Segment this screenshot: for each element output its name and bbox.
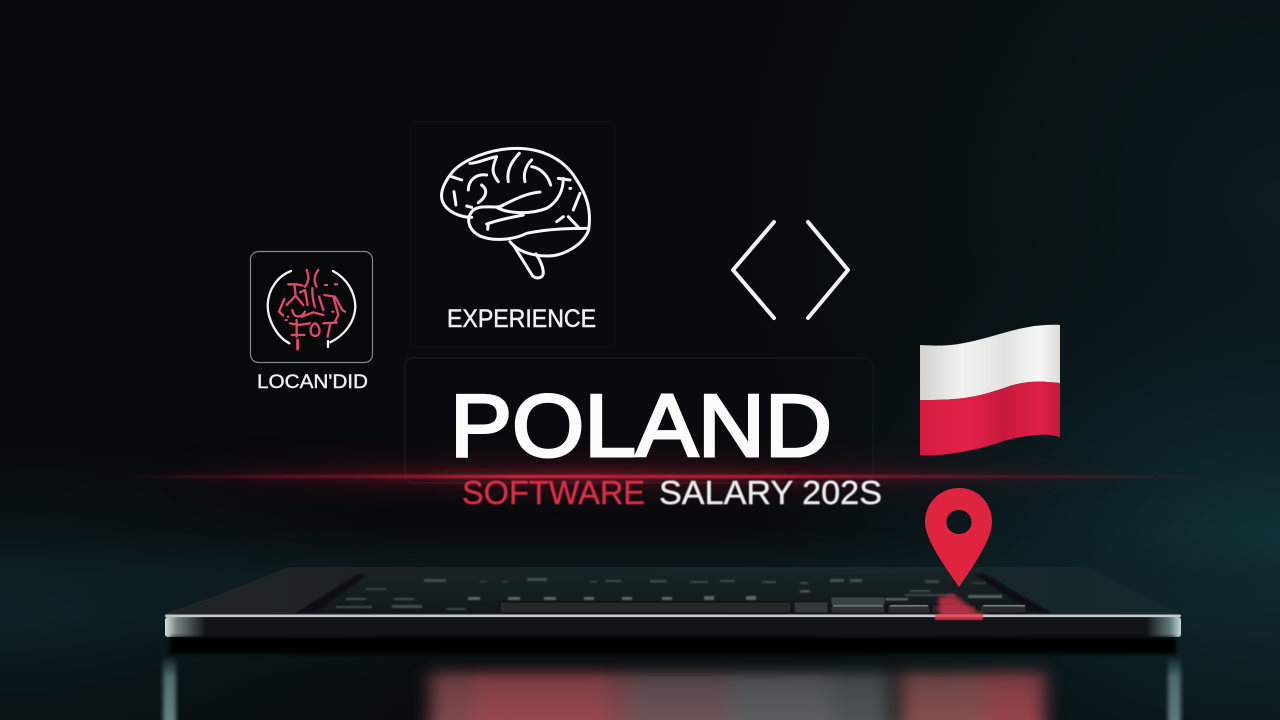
pin glow on edge	[935, 614, 983, 620]
pink traces	[279, 270, 345, 349]
silver highlight	[165, 614, 1181, 617]
laptop front edge	[165, 617, 1181, 637]
icon frame	[250, 252, 372, 362]
keys	[336, 578, 1002, 610]
card: experience	[441, 148, 596, 333]
panel: faint title frame	[405, 358, 873, 483]
pin glow on key	[938, 594, 990, 618]
shadow	[170, 637, 1176, 654]
subtitle: software salary	[462, 475, 882, 512]
keyboard well	[296, 574, 1052, 613]
icon: code brackets	[733, 222, 848, 318]
laptop reflection	[163, 655, 1181, 720]
right keys	[794, 597, 1026, 613]
label: local candid: LOCAN'DID	[257, 371, 368, 393]
flag white band	[920, 325, 1060, 400]
icon: circuit brain	[268, 270, 355, 349]
subtitle: software salary: SALARY 202S	[659, 475, 882, 512]
label: experience: EXPERIENCE	[447, 305, 596, 333]
reflection: right corner	[1168, 655, 1181, 720]
reflection colour blocks	[430, 668, 1045, 720]
circle arcs	[268, 271, 355, 343]
title: POLAND: POLAND	[450, 376, 832, 475]
panel: faint experience frame	[411, 122, 615, 347]
laptop	[165, 567, 1181, 654]
icon: location pin	[925, 488, 992, 587]
icon: Polish flag	[920, 325, 1060, 455]
space bar	[500, 602, 791, 613]
red glow line	[120, 462, 1210, 488]
icon: brain	[441, 148, 589, 278]
flag red band	[920, 382, 1060, 455]
subtitle: software salary: SOFTWARE	[462, 475, 645, 512]
card: local candid	[250, 252, 372, 393]
laptop deck	[165, 567, 1181, 618]
reflection: left corner	[163, 655, 176, 720]
